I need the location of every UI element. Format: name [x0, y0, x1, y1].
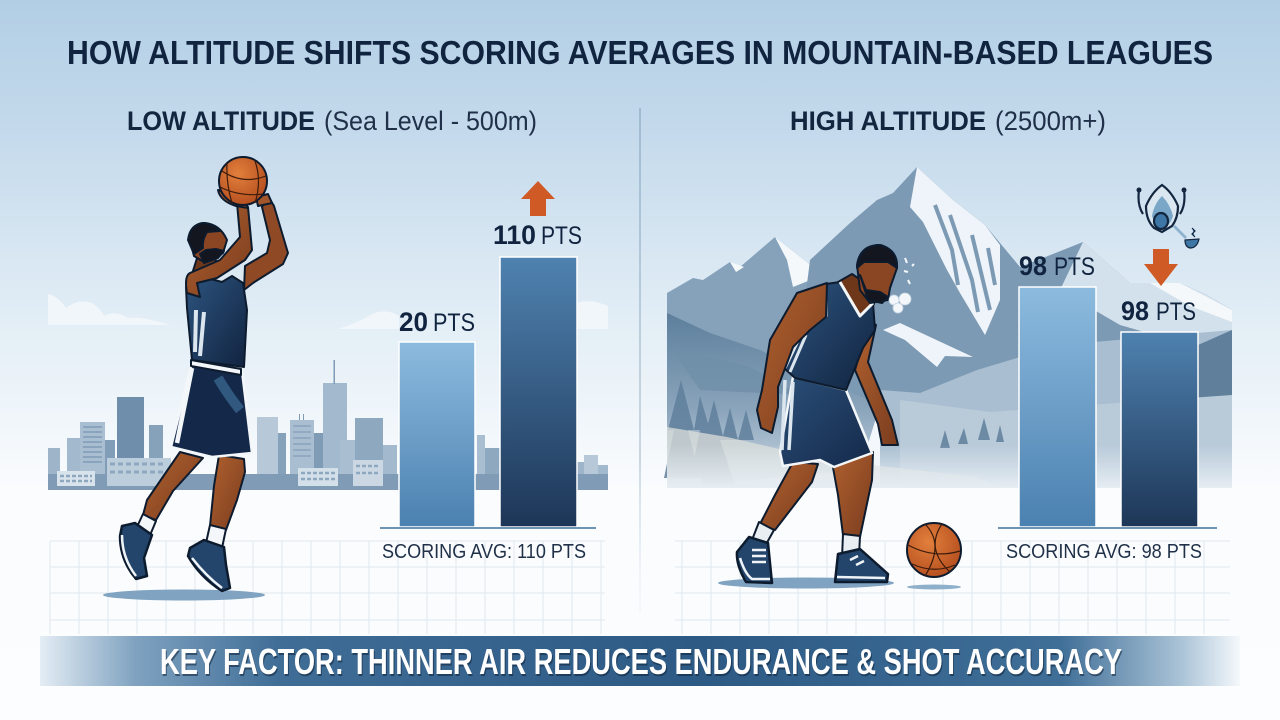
left leg [143, 452, 203, 520]
far arm [855, 320, 898, 445]
player tired, bent over [737, 245, 961, 583]
near arm and shoulder [186, 203, 252, 297]
shorts [780, 377, 872, 467]
socks [752, 522, 860, 558]
field [667, 427, 1000, 488]
panel: high altitude [664, 106, 1232, 634]
breath puff [889, 258, 914, 313]
city skyline [48, 360, 608, 490]
bar chart: high altitude [998, 185, 1217, 563]
court grid [50, 541, 605, 634]
ball shadow [907, 584, 961, 590]
bar: 110 pts [500, 257, 577, 527]
baseline [998, 527, 1217, 529]
light hill right [880, 330, 1232, 488]
forest hills left [667, 313, 880, 488]
value label: 20 PTS [399, 307, 475, 337]
court grid [675, 541, 1230, 634]
heading: high altitude: (2500m+) [995, 106, 1106, 136]
head [190, 223, 227, 262]
value label: 98 PTS reduced: PTS [1156, 298, 1196, 326]
right leg [832, 452, 873, 537]
icon: oxygen mask [1136, 185, 1199, 248]
scoring average label: SCORING AVG: 110 PTS [382, 541, 586, 563]
heading: high altitude: HIGH ALTITUDE [790, 106, 986, 136]
scoring average label: SCORING AVG: 98 PTS [1006, 541, 1202, 563]
main massif [790, 167, 1232, 420]
head [857, 245, 897, 303]
socks [135, 514, 226, 548]
hair and beard [188, 223, 224, 263]
value label: 20 PTS: 20 [399, 307, 428, 337]
far left range [667, 237, 860, 400]
player shooting [120, 157, 288, 591]
lower snow patch [883, 323, 973, 367]
value label: 110 PTS [493, 220, 582, 250]
shoes [737, 537, 888, 583]
value label: 98 PTS reduced [1121, 296, 1196, 326]
basketball [219, 157, 267, 205]
cloud [48, 294, 170, 325]
waistband [191, 360, 241, 375]
value label: 98 PTS: 98 [1019, 251, 1047, 281]
pine trees [664, 380, 1004, 488]
bar: 20 pts [399, 342, 475, 527]
bar: 98 pts reduced [1121, 332, 1198, 527]
neck [838, 274, 876, 317]
neck [192, 255, 220, 280]
jersey [783, 282, 875, 390]
panel: low altitude [48, 106, 608, 634]
pale snowfield right [1060, 242, 1232, 345]
left leg [760, 462, 818, 530]
shoes [120, 523, 230, 591]
shoe soles and laces [122, 535, 222, 588]
up arrow [521, 181, 555, 216]
right leg [210, 455, 245, 530]
value label: 98 PTS reduced: 98 [1121, 296, 1149, 326]
baseline [380, 527, 596, 529]
hair and beard [857, 245, 897, 303]
main peak snow [910, 167, 1000, 335]
far arm [244, 196, 288, 290]
player shadow [103, 590, 265, 600]
near arm [757, 283, 827, 433]
player shadow [718, 578, 894, 588]
value label: 98 PTS: PTS [1054, 253, 1095, 281]
mountain landscape [664, 167, 1232, 488]
value label: 110 PTS: PTS [541, 222, 582, 250]
down arrow [1144, 249, 1178, 286]
bar: 98 pts baseline [1019, 287, 1096, 527]
shorts [171, 363, 252, 457]
value label: 98 PTS [1019, 251, 1095, 281]
shoe soles and laces [740, 550, 885, 579]
heading: low altitude: LOW ALTITUDE [127, 106, 315, 136]
heading: low altitude [127, 106, 537, 136]
jersey [186, 274, 247, 367]
bar chart: low altitude [380, 181, 596, 563]
value label: 110 PTS: 110 [493, 220, 536, 250]
divider between panels [640, 108, 641, 613]
value label: 20 PTS: PTS [433, 309, 475, 337]
heading: low altitude: (Sea Level - 500m) [324, 106, 537, 136]
cloud behind bars [338, 301, 608, 329]
hands [218, 190, 272, 208]
basketball [907, 523, 961, 577]
heading: high altitude [790, 106, 1106, 136]
